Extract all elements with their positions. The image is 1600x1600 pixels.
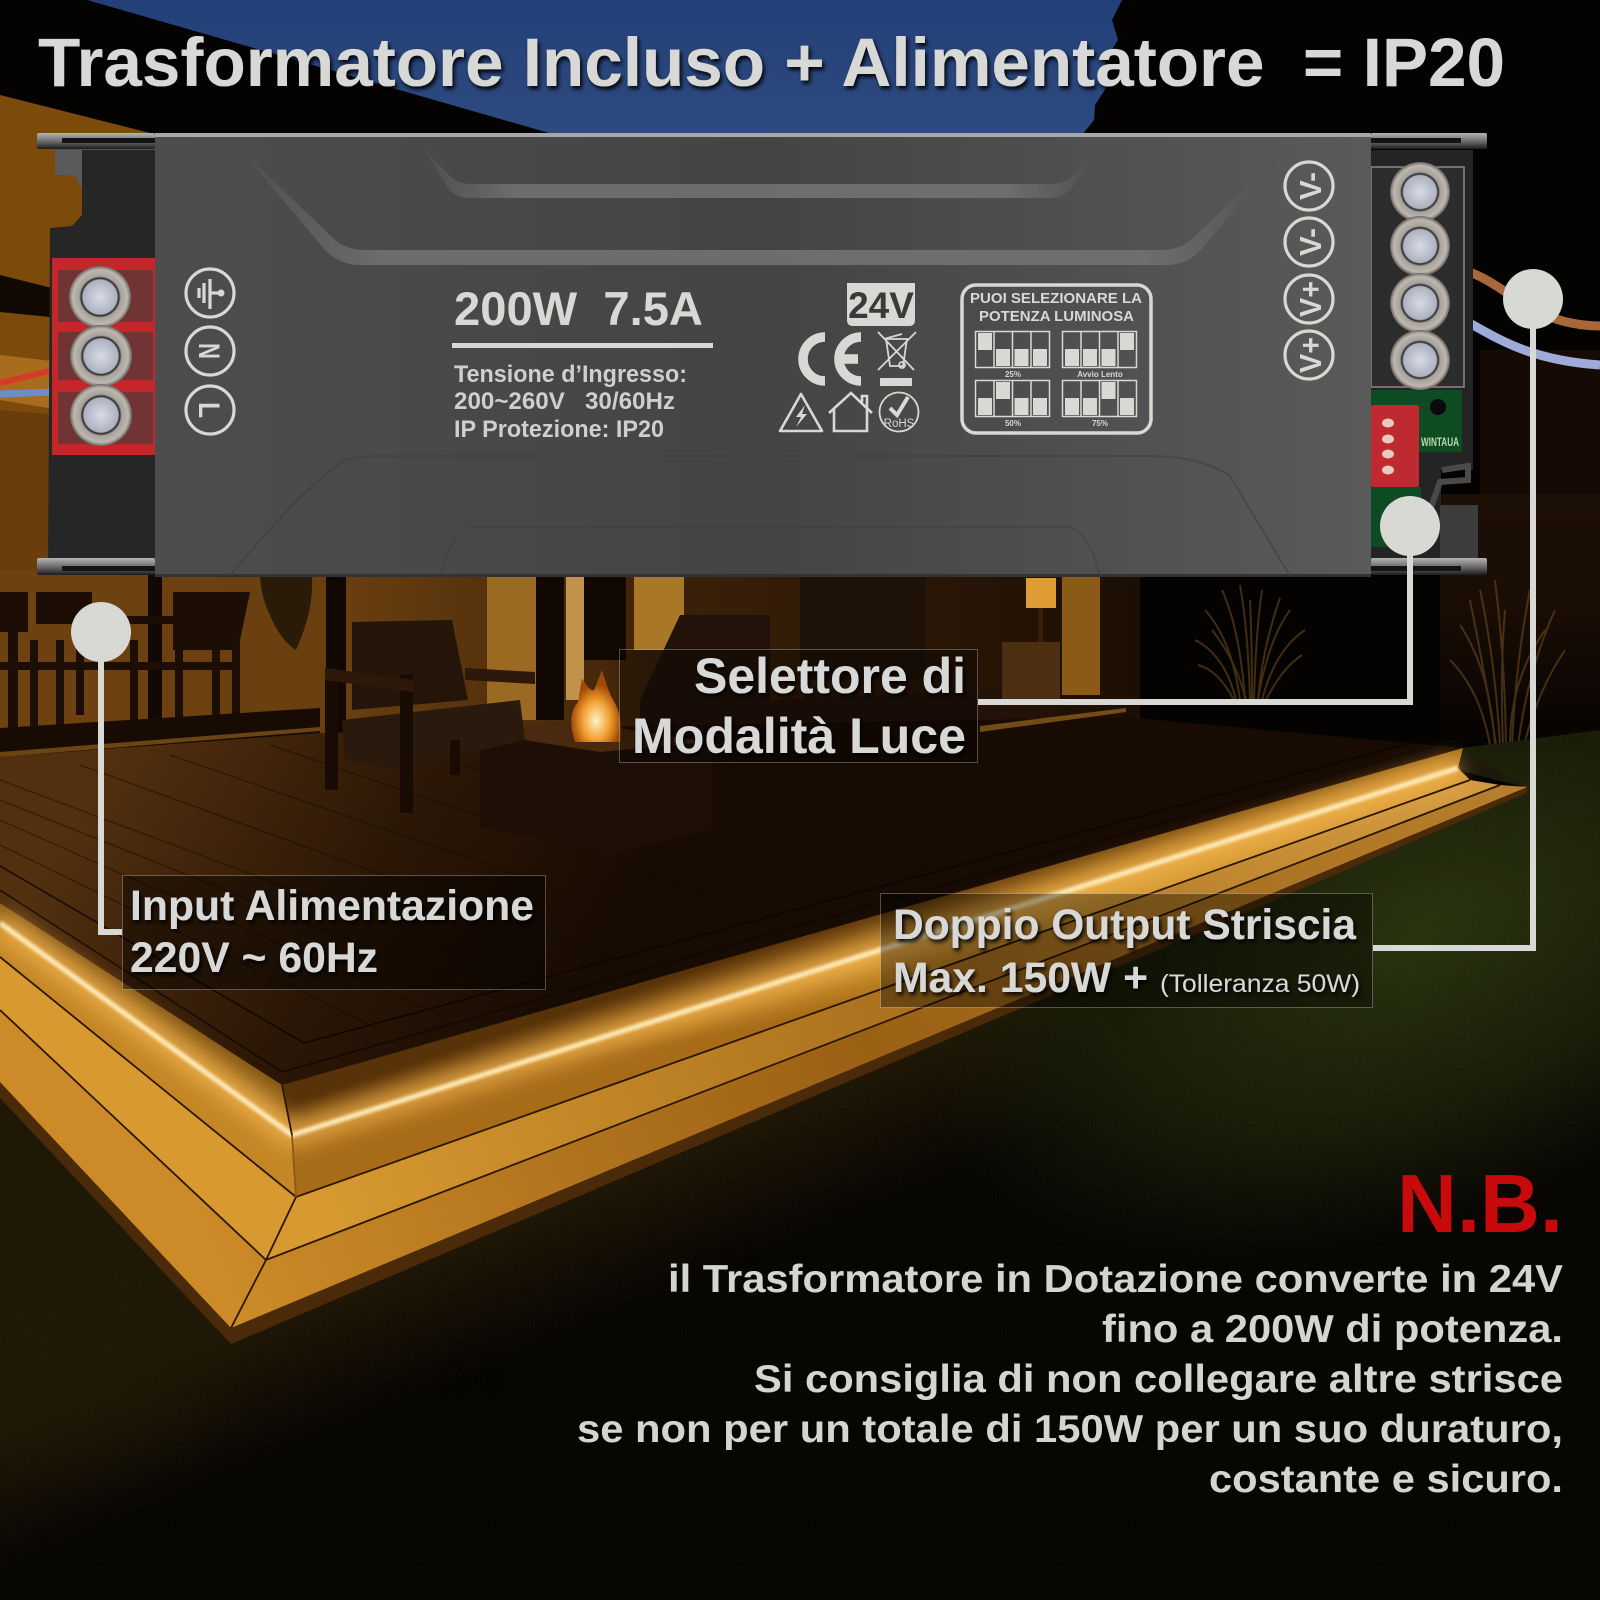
LED strip core bbox=[0, 768, 1458, 1135]
ornamental grass tuft, right bbox=[1450, 580, 1565, 745]
label text: Doppio Output Striscia bbox=[893, 901, 1357, 949]
LED glow bbox=[0, 768, 1458, 1135]
connector line bbox=[978, 545, 1410, 702]
label text: Input Alimentazione bbox=[130, 882, 534, 930]
label text: Selettore di bbox=[694, 648, 966, 704]
sofa behind the label bbox=[640, 615, 1010, 780]
note text: costante e sicuro. bbox=[1209, 1458, 1563, 1501]
board marking: WINTAUA bbox=[1421, 435, 1459, 449]
light power selector panel bbox=[962, 285, 1151, 433]
high voltage warning icon bbox=[780, 394, 822, 431]
fire pit table bbox=[480, 670, 712, 853]
indoor use house icon bbox=[829, 393, 872, 431]
bottom right flange bbox=[1371, 558, 1487, 575]
input screw neutral bbox=[70, 325, 132, 387]
DIP setting 50% bbox=[976, 380, 1050, 428]
output icon V minus 2 bbox=[1285, 218, 1333, 266]
top left flange bbox=[37, 133, 155, 149]
neutral icon bbox=[186, 327, 234, 375]
output screw 3 bbox=[1390, 273, 1450, 333]
input screw earth bbox=[69, 266, 131, 328]
table lamp bbox=[1026, 578, 1056, 642]
lawn bbox=[0, 730, 1600, 1600]
label text: 220V ~ 60Hz bbox=[130, 934, 378, 982]
interior of the house behind the deck bbox=[0, 570, 1140, 780]
note text bbox=[577, 1258, 1563, 1501]
input specifications: Tensione d’Ingresso: bbox=[454, 361, 687, 388]
frame board outer line bbox=[0, 738, 1463, 1072]
connector dot bbox=[1503, 269, 1563, 329]
label text: Max. 150W + bbox=[893, 954, 1148, 1002]
connector dot bbox=[1380, 496, 1440, 556]
label text bbox=[893, 901, 1360, 1002]
label box bbox=[122, 876, 546, 990]
label text: (Tolleranza 50W) bbox=[1160, 970, 1360, 998]
fascia right bbox=[282, 748, 1463, 1135]
lawn at the far end of the step bbox=[1458, 748, 1527, 788]
lower relief left bbox=[230, 456, 1290, 576]
input specifications: IP Protezione: IP20 bbox=[454, 416, 664, 443]
lower relief inner bbox=[440, 527, 1100, 576]
roof eave, warm ceiling on the left bbox=[0, 95, 160, 600]
RoHS icon: RoHS bbox=[884, 418, 915, 430]
ornamental grass tuft, centre bbox=[1195, 585, 1305, 700]
input specifications: 200~260V 30/60Hz bbox=[454, 388, 675, 415]
wires to input terminal bbox=[0, 370, 54, 394]
right end cap bbox=[1371, 133, 1487, 575]
earth symbol icon bbox=[186, 269, 234, 317]
left end cap bbox=[37, 133, 155, 575]
output icon V minus 1 bbox=[1285, 162, 1333, 210]
CE mark bbox=[803, 337, 861, 381]
curtains bbox=[1062, 577, 1100, 695]
fascia left bbox=[0, 903, 292, 1135]
output terminal block bbox=[1371, 167, 1464, 387]
output icon V minus 1: V- bbox=[1293, 172, 1328, 200]
label text: Modalità Luce bbox=[632, 708, 966, 764]
picture-frame board line bbox=[0, 735, 1440, 1043]
wires from output terminal bbox=[1464, 270, 1600, 365]
output icon V plus 2: V+ bbox=[1293, 337, 1328, 373]
label text bbox=[632, 648, 966, 764]
DIP setting 75% bbox=[1062, 380, 1136, 428]
notch clip bbox=[55, 150, 82, 190]
DIP setting soft start bbox=[1062, 332, 1136, 379]
callout: input power bbox=[71, 602, 546, 990]
input specifications bbox=[454, 361, 687, 443]
green circuit board bbox=[1371, 390, 1462, 547]
housing cover bbox=[155, 133, 1371, 577]
wooden deck surface bbox=[0, 708, 1463, 1085]
live icon: L bbox=[192, 402, 225, 418]
note text: il Trasformatore in Dotazione converte in 24V bbox=[668, 1258, 1563, 1301]
24V badge: 24V bbox=[848, 285, 914, 326]
callout: dual strip output bbox=[880, 269, 1563, 1008]
DIP setting 75%: 75% bbox=[1092, 419, 1108, 428]
callout: light mode selector bbox=[620, 496, 1440, 764]
live icon bbox=[186, 386, 234, 434]
dark outer lip bbox=[0, 785, 1527, 1344]
output screw 4 bbox=[1390, 330, 1450, 390]
transformer bbox=[37, 133, 1487, 577]
label text bbox=[130, 882, 534, 982]
illuminated stepped edge of the deck bbox=[0, 748, 1527, 1344]
plank gaps bbox=[0, 740, 1040, 1030]
light door column bbox=[566, 570, 584, 700]
flame bbox=[571, 670, 621, 742]
output screw 2 bbox=[1390, 216, 1450, 276]
board grooves bbox=[0, 780, 1500, 1328]
neutral icon: N bbox=[192, 343, 225, 359]
third board bbox=[0, 785, 1527, 1328]
connector line bbox=[101, 650, 122, 932]
potted plant bbox=[260, 577, 312, 650]
note heading: N.B. bbox=[1397, 1157, 1563, 1250]
side chair bbox=[1002, 642, 1060, 702]
DIP setting 25% bbox=[976, 332, 1050, 379]
first board below the LED bbox=[0, 768, 1470, 1197]
dark door frames bbox=[148, 570, 626, 740]
output icon V plus 1 bbox=[1285, 275, 1333, 323]
connector line bbox=[1373, 320, 1533, 948]
upper outer relief bbox=[238, 147, 1288, 265]
DIP setting 50%: 50% bbox=[1005, 419, 1021, 428]
selector heading bbox=[970, 290, 1142, 325]
connector dot bbox=[71, 602, 131, 662]
second board bbox=[0, 780, 1500, 1260]
upper inner relief bbox=[423, 148, 1099, 198]
garden fence on the right bbox=[1440, 494, 1600, 744]
output icon V minus 2: V- bbox=[1293, 228, 1328, 256]
red input terminal block bbox=[52, 258, 155, 455]
output screw 1 bbox=[1390, 162, 1450, 222]
sky bbox=[87, 0, 1122, 135]
selector heading: PUOI SELEZIONARE LA bbox=[970, 290, 1142, 307]
armchair bbox=[325, 620, 535, 813]
label box bbox=[620, 650, 978, 762]
DIP setting 25%: 25% bbox=[1005, 370, 1021, 379]
input screw live bbox=[70, 384, 132, 446]
output icon V plus 2 bbox=[1285, 331, 1333, 379]
dusk foliage behind the transformer bbox=[1480, 350, 1600, 494]
floor sill bbox=[0, 708, 320, 760]
note text: fino a 200W di potenza. bbox=[1102, 1308, 1563, 1351]
red DIP switch bbox=[1371, 405, 1419, 487]
left first board bbox=[0, 923, 296, 1197]
output icon V plus 1: V+ bbox=[1293, 281, 1328, 317]
window pane bbox=[634, 570, 684, 650]
note text: Si consiglia di non collegare altre strisce bbox=[754, 1358, 1563, 1401]
top right flange bbox=[1371, 133, 1487, 149]
threshold highlight, right bbox=[980, 708, 1126, 732]
WEEE bin icon bbox=[878, 332, 916, 386]
dining table and chairs bbox=[0, 592, 250, 750]
RoHS icon bbox=[880, 392, 918, 432]
rating underline bbox=[452, 343, 713, 348]
bright wall panel bbox=[487, 570, 536, 720]
title: Trasformatore Incluso + Alimentatore = IP20 bbox=[38, 24, 1505, 101]
label box bbox=[880, 894, 1372, 1008]
note text: se non per un totale di 150W per un suo duraturo, bbox=[577, 1408, 1563, 1451]
foliage plant behind the sofa bbox=[800, 570, 925, 680]
deck threshold highlight bbox=[0, 727, 320, 757]
DIP setting soft start: Avvio Lento bbox=[1077, 370, 1123, 379]
selector heading: POTENZA LUMINOSA bbox=[979, 308, 1134, 325]
bottom left flange bbox=[37, 558, 155, 575]
rating heading: 200W 7.5A bbox=[454, 282, 703, 335]
